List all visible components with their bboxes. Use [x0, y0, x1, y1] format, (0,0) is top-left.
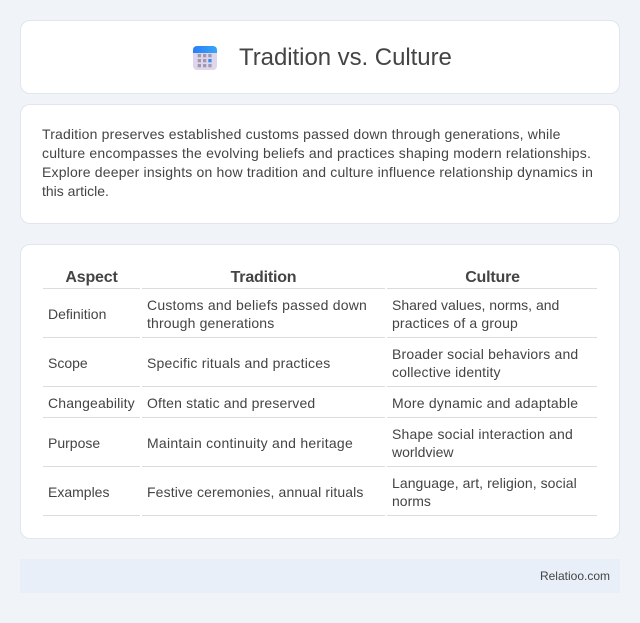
table row: Examples	[43, 475, 597, 516]
panel: header card	[20, 20, 620, 94]
text block: introduction: this article.	[42, 183, 109, 199]
table row: Scope: Scope	[48, 355, 88, 371]
text block: introduction	[42, 126, 593, 199]
table row: Examples: Festive ceremonies, annual rituals	[147, 484, 364, 500]
table header: Culture	[465, 269, 520, 286]
table row: Purpose: Shape social interaction and	[392, 426, 573, 442]
table row: Scope: Specific rituals and practices	[147, 355, 330, 371]
table row: Scope: collective identity	[392, 364, 501, 380]
text block: introduction: culture encompasses the evolving beliefs and practices shaping modern relationships.	[42, 145, 591, 161]
panel: comparison table	[20, 244, 620, 539]
table row: Purpose: Maintain continuity and heritage	[147, 435, 353, 451]
table header	[43, 269, 597, 289]
table header: Tradition	[231, 269, 296, 286]
text block: introduction: Explore deeper insights on how tradition and culture influence relationship dynamics in	[42, 164, 593, 180]
icon: calendar	[193, 46, 217, 70]
footer	[20, 559, 620, 593]
table row: Definition: Definition	[48, 306, 106, 322]
footer brand: Relatioo.com	[540, 569, 610, 583]
table row: Definition	[43, 297, 597, 338]
table row: Definition: practices of a group	[392, 315, 518, 331]
table header: Aspect	[65, 269, 118, 286]
table row: Changeability: Often static and preserved	[147, 395, 315, 411]
table row: Definition: Shared values, norms, and	[392, 297, 559, 313]
table row: Definition: through generations	[147, 315, 274, 331]
table row: Examples: Examples	[48, 484, 109, 500]
table row: Changeability	[43, 395, 597, 418]
table row: Examples: Language, art, religion, social	[392, 475, 577, 491]
table row: Scope: Broader social behaviors and	[392, 346, 578, 362]
table row: Scope	[43, 346, 597, 387]
text block: introduction: Tradition preserves established customs passed down through generations, while	[42, 126, 561, 142]
table row: Purpose	[43, 426, 597, 467]
table row: Purpose: worldview	[392, 444, 453, 460]
panel: introduction	[20, 104, 620, 224]
table row: Examples: norms	[392, 493, 431, 509]
table row: Purpose: Purpose	[48, 435, 100, 451]
table row: Changeability: Changeability	[48, 395, 135, 411]
table row: Changeability: More dynamic and adaptable	[392, 395, 578, 411]
title: Tradition vs. Culture	[239, 44, 452, 71]
table row: Definition: Customs and beliefs passed down	[147, 297, 367, 313]
